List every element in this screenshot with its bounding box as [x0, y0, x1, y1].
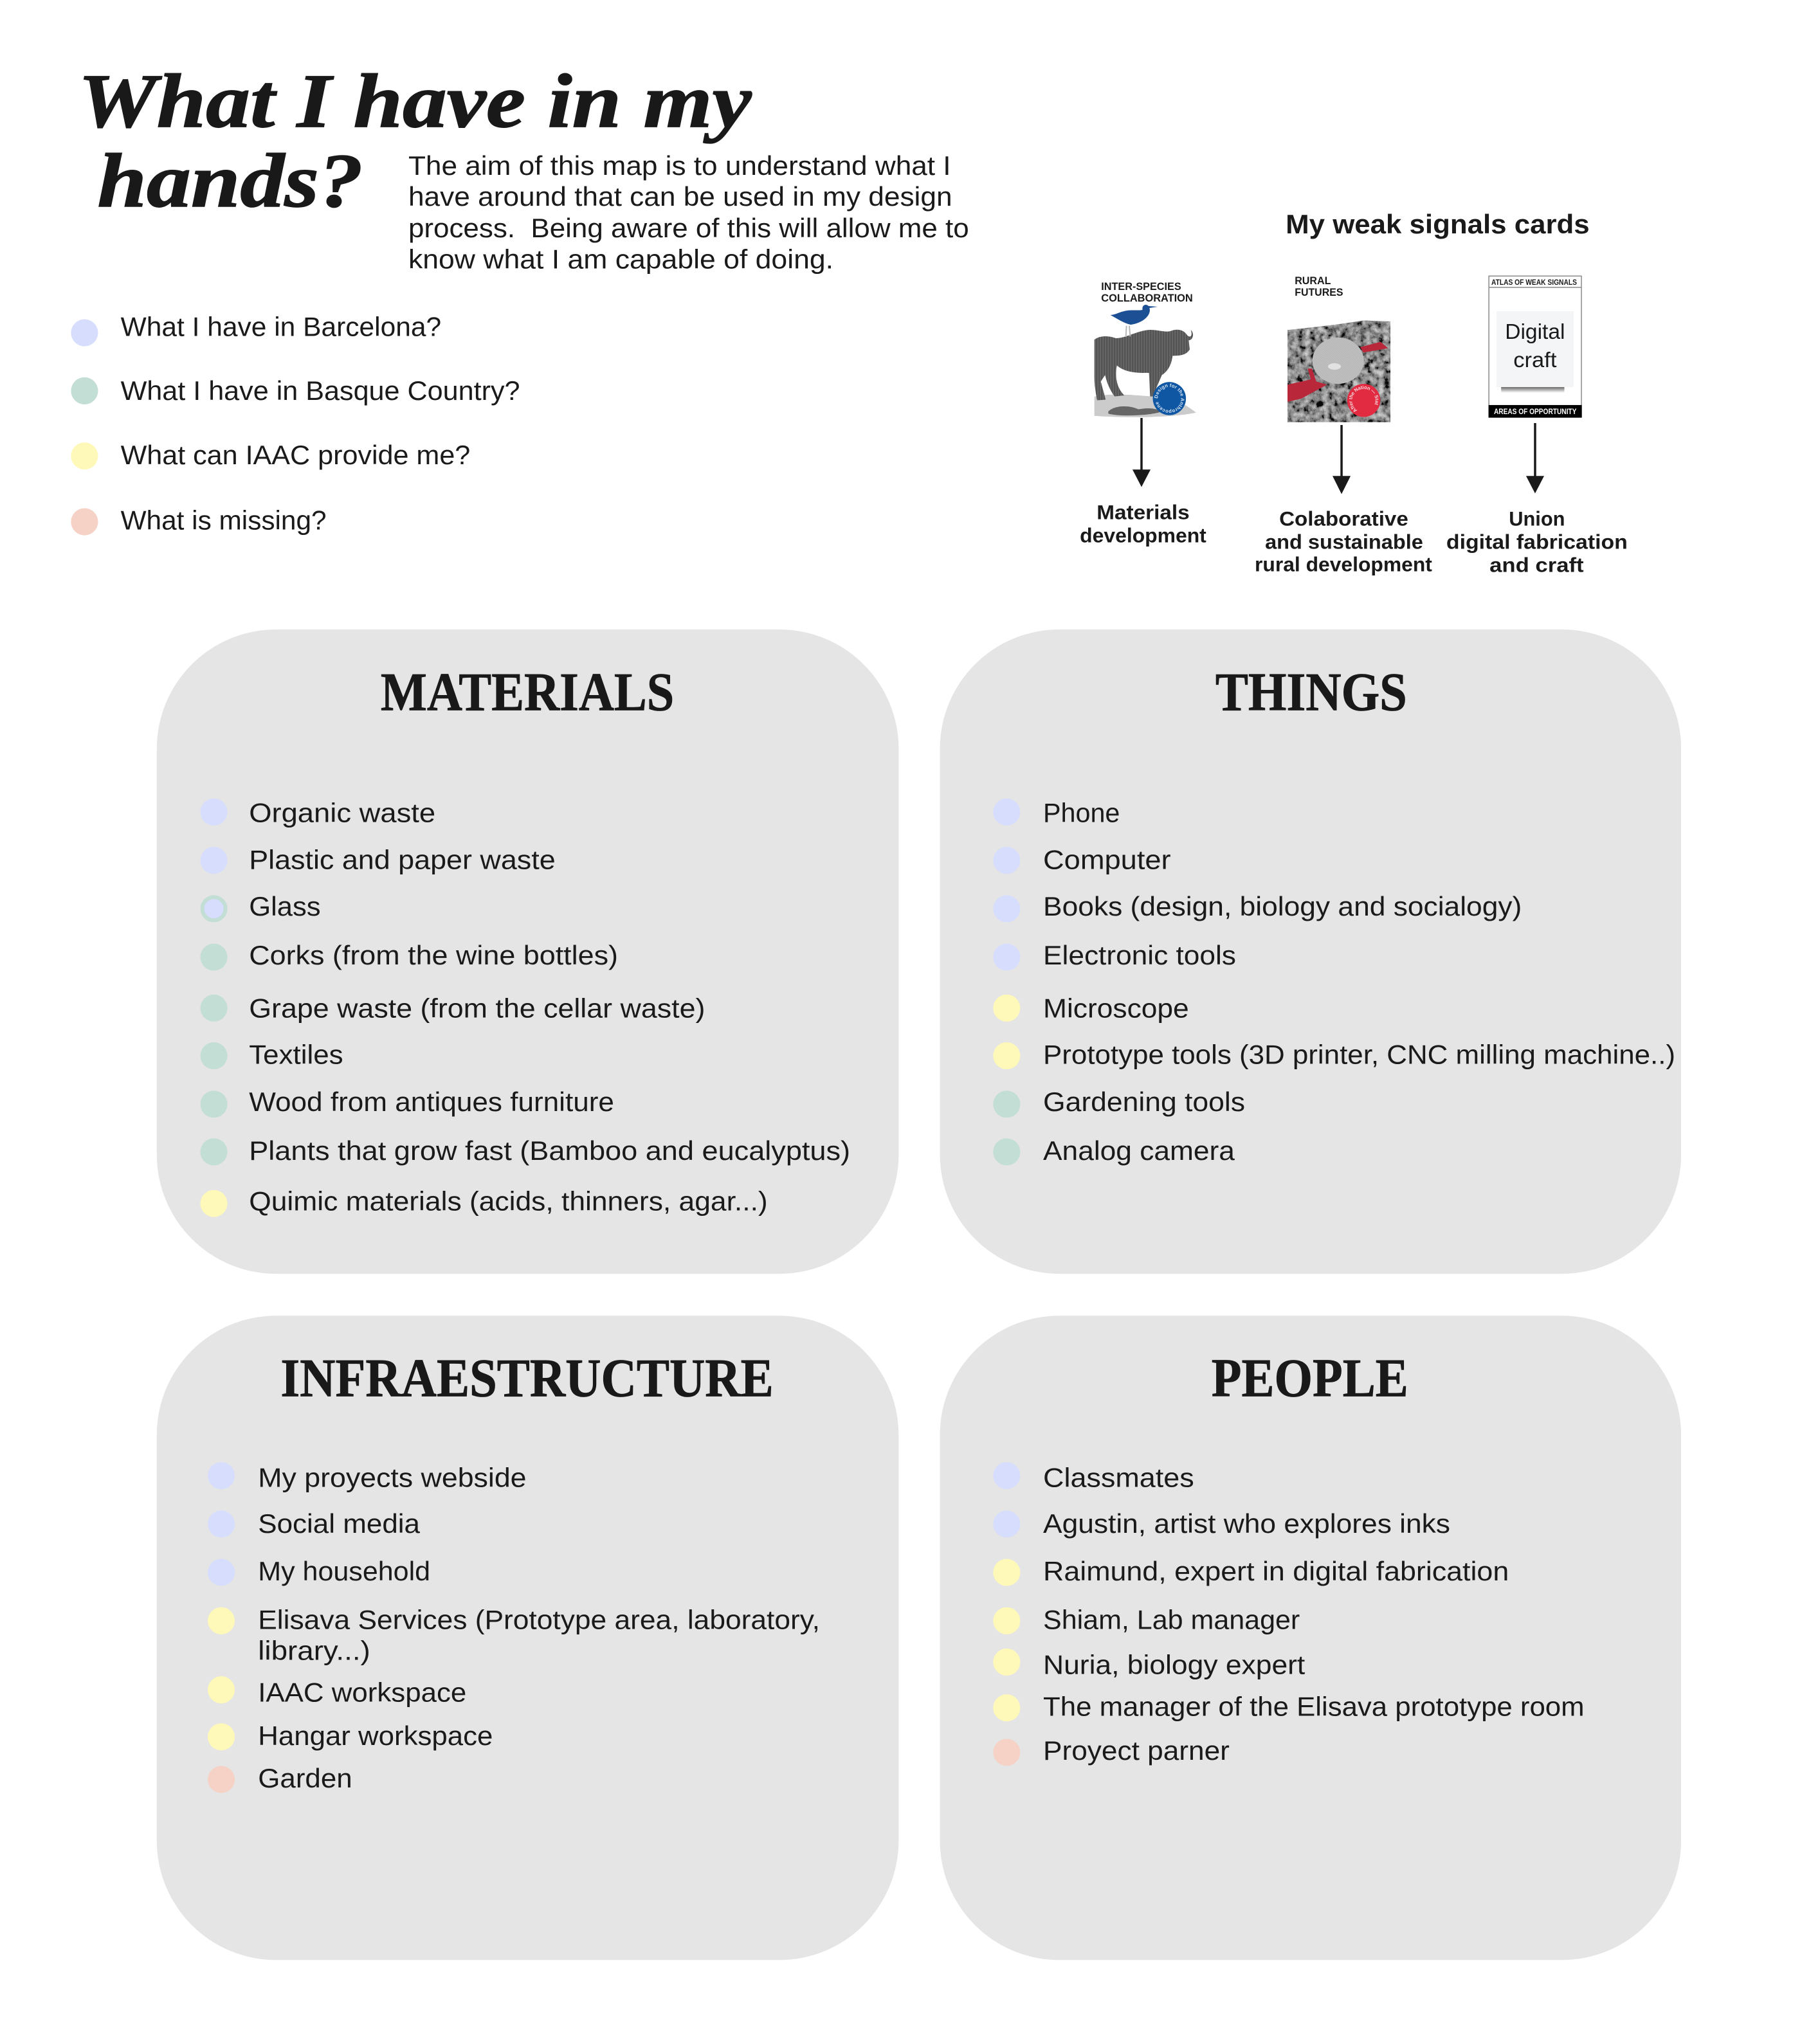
list: things: Prototype tools (3D printer, CNC milling machine..)	[1043, 1040, 1675, 1070]
heading: people: PEOPLE	[1212, 1348, 1408, 1409]
label: union digital fabrication and craft: and craft	[1489, 554, 1584, 577]
list: things: Computer	[1043, 845, 1171, 875]
card: digital craft: AREAS OF OPPORTUNITY	[1494, 408, 1577, 416]
panel: people	[940, 1316, 1681, 1960]
list: infraestructure: Social media	[258, 1508, 421, 1539]
label: materials development	[1080, 501, 1206, 547]
list: things: Electronic tools	[1043, 940, 1236, 970]
label: union digital fabrication and craft: digital fabrication	[1446, 531, 1628, 554]
heading: weak signals cards: My weak signals cards	[1286, 209, 1590, 239]
list: people: Raimund, expert in digital fabrication	[1043, 1556, 1509, 1586]
label: collaborative rural development: and sustainable	[1265, 531, 1423, 554]
card: inter-species collaboration: Design for the Anthropocene	[1154, 383, 1185, 413]
arrow: card 3	[1526, 423, 1544, 493]
list: infraestructure: IAAC workspace	[258, 1678, 466, 1708]
title: What I have in my	[78, 59, 752, 143]
card: digital craft: ATLAS OF WEAK SIGNALS	[1491, 278, 1577, 287]
legend: What is missing?	[121, 505, 327, 536]
list: people: The manager of the Elisava prototype room	[1043, 1692, 1585, 1722]
list: things: Gardening tools	[1043, 1087, 1245, 1117]
list: materials: Plants that grow fast (Bamboo and eucalyptus)	[249, 1135, 850, 1166]
list: things	[993, 797, 1675, 1166]
arrow: card 1	[1133, 418, 1151, 487]
panel: things	[940, 629, 1681, 1274]
list: people: Classmates	[1043, 1463, 1194, 1493]
card: inter-species collaboration: COLLABORATION	[1101, 292, 1193, 304]
intro paragraph: have around that can be used in my design	[408, 181, 952, 212]
list: infraestructure: Hangar workspace	[258, 1721, 493, 1751]
list: infraestructure: My household	[258, 1556, 430, 1586]
title	[78, 59, 752, 223]
label: collaborative rural development	[1255, 508, 1432, 576]
heading: materials: MATERIALS	[381, 662, 674, 722]
legend: What I have in Barcelona?	[121, 312, 441, 342]
legend: What can IAAC provide me?	[121, 440, 470, 470]
list: materials: Quimic materials (acids, thinners, agar...)	[249, 1186, 768, 1216]
intro paragraph: process. Being aware of this will allow me to	[408, 213, 969, 243]
list: infraestructure: Elisava Services (Prototype area, laboratory,	[258, 1604, 820, 1634]
list: things: Analog camera	[1043, 1135, 1235, 1166]
card: digital craft: Digital	[1505, 320, 1565, 344]
arrow: card 2	[1333, 425, 1351, 494]
label: collaborative rural development: Colaborative	[1279, 508, 1408, 530]
panel: materials	[157, 629, 898, 1274]
label: materials development: Materials	[1097, 501, 1190, 523]
list: people: Nuria, biology expert	[1043, 1650, 1306, 1680]
panel: infraestructure	[157, 1316, 898, 1960]
list: infraestructure: My proyects webside	[258, 1463, 527, 1493]
label: collaborative rural development: rural development	[1255, 554, 1432, 576]
list: people	[993, 1462, 1585, 1766]
list: people: Proyect parner	[1043, 1735, 1230, 1766]
card: rural futures: RURAL	[1295, 275, 1331, 287]
list: things: Books (design, biology and socialogy)	[1043, 891, 1522, 921]
list: materials: Plastic and paper waste	[249, 845, 556, 875]
card: rural futures: FUTURES	[1295, 286, 1343, 298]
title: hands?	[97, 138, 363, 223]
list: things: Microscope	[1043, 993, 1189, 1023]
list: materials: Textiles	[249, 1040, 343, 1070]
list: materials: Glass	[249, 891, 321, 921]
label: materials development: development	[1080, 525, 1206, 547]
card: rural futures	[1288, 275, 1390, 422]
card: inter-species collaboration	[1095, 280, 1196, 417]
list: people: Agustin, artist who explores inks	[1043, 1508, 1450, 1539]
label: union digital fabrication and craft: Union	[1509, 508, 1565, 530]
list: infraestructure: library...)	[258, 1635, 370, 1665]
heading: things: THINGS	[1215, 662, 1407, 722]
card: digital craft: craft	[1513, 348, 1556, 372]
list: materials: Wood from antiques furniture	[249, 1087, 614, 1117]
list: infraestructure	[208, 1462, 820, 1793]
card: inter-species collaboration: INTER-SPECIES	[1101, 280, 1181, 293]
label: union digital fabrication and craft	[1446, 508, 1628, 577]
intro paragraph: know what I am capable of doing.	[408, 244, 833, 274]
intro paragraph: The aim of this map is to understand what I	[408, 150, 951, 181]
list: infraestructure: Garden	[258, 1763, 352, 1793]
card: digital craft	[1489, 276, 1582, 418]
list: materials: Organic waste	[249, 797, 435, 828]
list: materials	[200, 797, 850, 1217]
legend: What I have in Basque Country?	[121, 375, 520, 406]
heading: infraestructure: INFRAESTRUCTURE	[280, 1348, 774, 1409]
intro paragraph	[408, 150, 969, 274]
list: things: Phone	[1043, 797, 1120, 828]
list: materials: Grape waste (from the cellar waste)	[249, 993, 705, 1023]
list: people: Shiam, Lab manager	[1043, 1604, 1300, 1634]
legend	[71, 312, 520, 536]
card: rural futures: After the Nation — State	[1349, 386, 1379, 412]
list: materials: Corks (from the wine bottles)	[249, 940, 618, 970]
